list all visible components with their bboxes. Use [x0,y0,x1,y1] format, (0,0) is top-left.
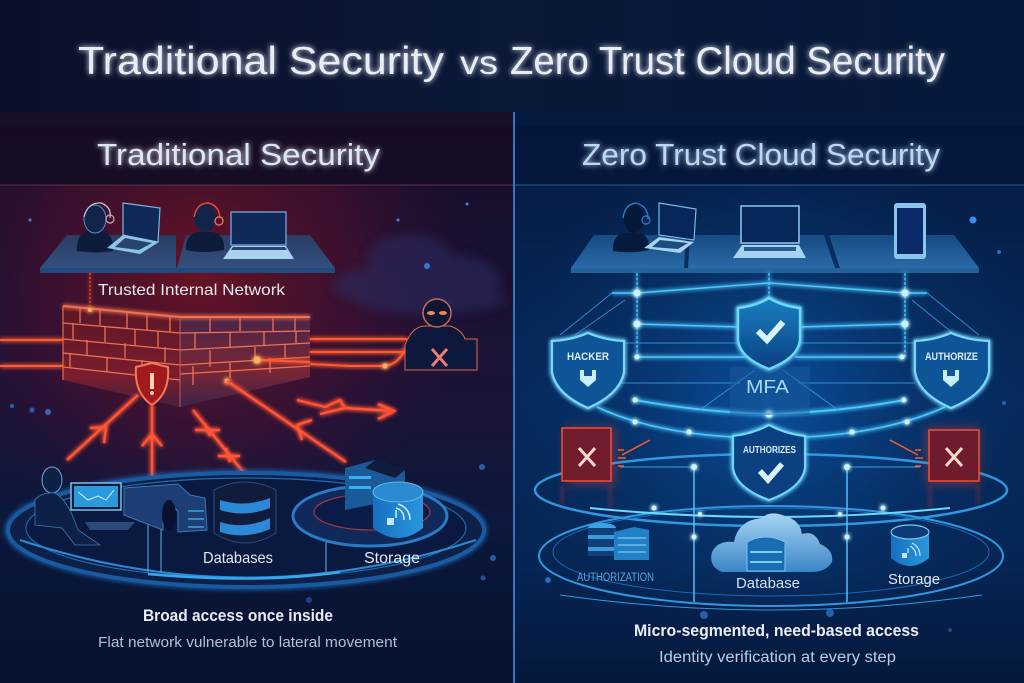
icon: hacker [405,299,477,370]
title: Zero Trust Cloud Security [510,40,945,83]
icon: server machine [124,484,207,532]
caption: zero trust: Identity verification at every step [659,649,896,666]
lateral movement arrows [67,381,394,482]
red glowing network lines [0,273,407,366]
arrow 3 [193,410,248,478]
MFA block: MFA [746,377,789,397]
arrow 2 [142,405,162,482]
zero trust network mesh [597,273,945,437]
icon: analyst at workstation [35,467,135,545]
label: database: Database [736,575,800,592]
red leakage under blocked boxes [562,485,978,510]
icon: user with headset 1 [77,203,114,252]
icon: shield left [552,333,624,408]
icon: red alert shield [136,363,168,405]
icon: red x [432,349,447,366]
icon: laptop [644,203,696,253]
label: storage: Storage [364,550,420,567]
icon: shield right [915,333,989,408]
icon: laptop 2 [223,212,294,259]
left user platform [40,203,335,273]
arrow 1 [67,395,138,460]
icon: blocked box right [890,427,980,485]
caption: zero trust: Micro-segmented, need-based access [634,622,919,640]
title: vs [460,44,498,81]
caption: traditional security: Flat network vulnerable to lateral movement [98,634,398,651]
icon: shield authorizes [733,425,805,500]
title: Traditional Security [78,40,445,83]
panel: zero trust cloud security [515,112,1024,683]
icon: storage server back [345,460,405,510]
glowing nodes [88,308,388,384]
icon: laptop 1 [107,203,160,254]
icon: shield MFA [738,298,800,369]
icon: database server stack [588,523,649,560]
caption: traditional security [98,607,398,651]
arrow 4 [227,381,346,462]
icon: smartphone [894,203,926,259]
icon: laptop center [733,206,806,258]
left resource ring [8,460,484,587]
lower mesh nodes [652,464,886,540]
firewall wall [63,306,310,407]
background stars and grid glints [10,202,1006,632]
MFA block [730,367,810,415]
storage sub-ring [293,486,447,546]
label: hacker: HACKER [567,351,609,363]
label: storage right: Storage [888,571,940,588]
heading: zero trust cloud security: Zero Trust Cloud Security [582,137,940,172]
icon: clouds backdrop left [333,234,505,314]
caption: zero trust [634,622,919,666]
icon: storage cylinder front [373,482,423,538]
label: authorization: AUTHORIZATION [577,572,654,584]
panel divider [513,112,515,683]
right device platform [571,203,979,273]
label: databases: Databases [203,550,273,567]
title [78,40,945,83]
arrow 5 [297,400,394,419]
icon: storage cylinder [891,525,929,566]
rings and lower network [535,454,1007,610]
heading: traditional security: Traditional Security [97,137,381,172]
icon: blocked box left [562,427,650,485]
panel: traditional security [0,112,513,683]
label: trusted internal network: Trusted Internal Network [98,282,286,299]
label: authorizes: AUTHORIZES [743,444,796,456]
icon: user with headset [613,203,650,252]
icon: user with headset 2 [186,203,224,252]
caption: traditional security: Broad access once inside [143,607,333,625]
background header band [0,0,1024,125]
mesh nodes [632,290,910,434]
label: authorize: AUTHORIZE [925,351,978,363]
icon: cloud database [711,513,832,572]
icon: database cylinder [214,482,276,543]
